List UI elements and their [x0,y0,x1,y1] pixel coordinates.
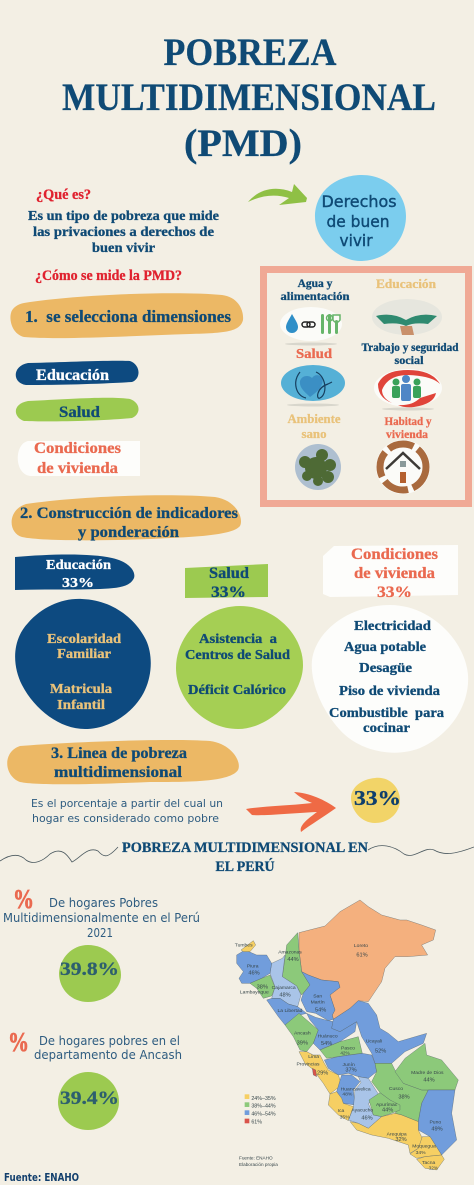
text block: ancash households [34,1034,182,1062]
step 3 pill: multidimensional [54,764,183,781]
label: condiciones de vivienda 33%: 33% [377,584,412,601]
icon: people and social security [374,369,442,410]
map of peru: 48% [279,993,291,999]
map of peru: Huancavelica [341,1087,371,1093]
text block: poverty line [31,797,223,825]
map of peru: 32% [429,1166,438,1171]
heading: pobreza en el peru: POBREZA MULTIDIMENSIONAL EN [122,840,368,856]
pill: condiciones de vivienda: de vivienda [37,460,118,477]
map source: Fuente: ENAHO [239,1156,273,1161]
panel: condiciones blob: Piso de vivienda [339,684,440,699]
map source: Elaboración propia [239,1162,278,1167]
label: educacion 33% [15,554,134,591]
map of peru: 37% [345,1067,357,1073]
legend: 38%–44% [251,1104,276,1110]
map of peru: 44% [287,957,299,963]
label: habitat y vivienda: Habitad y [384,416,432,428]
heading: como se mide: ¿Cómo se mide la PMD? [35,268,182,284]
map of peru: 46% [248,971,260,977]
map of peru: 32% [395,1137,407,1143]
label: educacion 33%: 33% [62,576,94,591]
map of peru: Lima [308,1054,319,1060]
legend: 46%–54% [251,1111,276,1117]
label: habitat y vivienda: vivienda [386,429,428,441]
step 1 pill: 1. se selecciona dimensiones [25,307,232,326]
callout: derechos de buen vivir: vivir [340,231,373,250]
label: agua y alimentacion: Agua y [298,278,333,290]
label: educacion 33%: Educación [46,558,111,573]
label: trabajo y seguridad social: Trabajo y seguridad [362,342,459,354]
callout: 33 percent [351,778,401,823]
label: ambiente sano: sano [302,426,326,441]
map source [239,1156,278,1167]
pill: condiciones de vivienda: Condiciones [34,440,121,457]
panel: educacion blob: Infantil [57,697,105,712]
map of peru: Madre de Dios [411,1070,444,1076]
panel: salud blob: Centros de Salud [185,647,291,662]
map of peru: Arequipa [387,1131,407,1137]
panel: condiciones blob: Agua potable [344,640,426,655]
map of peru: 49% [431,1126,443,1132]
pill: salud: Salud [59,404,100,421]
map of peru: 39% [297,1041,308,1047]
label: salud 33%: 33% [211,584,246,601]
panel: condiciones blob: Combustible para [329,706,444,721]
map of peru: Ucayali [366,1038,382,1044]
icon: percent second: % [8,1027,29,1057]
heading: pobreza en el peru [122,840,368,875]
map of peru: Tumbes [235,942,253,948]
legend: 61% [251,1119,262,1125]
callout: 39.4: 39.4% [60,1088,119,1109]
text block: peru households: 2021 [87,926,113,940]
title [62,31,436,165]
map of peru: 44% [423,1077,435,1083]
map of peru: Huánuco [318,1034,338,1040]
map of peru: Ayacucho [351,1107,373,1113]
panel: educacion blob: Familiar [57,646,111,661]
icon: percent first: % [13,884,34,914]
callout: derechos de buen vivir [315,175,406,261]
text block: peru households [3,896,200,940]
text block: definition: buen vivir [92,241,155,256]
step 3 pill [7,740,239,784]
icon: tree globe [295,444,341,490]
map of peru: Cusco [389,1086,403,1092]
text block: definition: las privaciones a derechos de [33,225,214,240]
arrow: green [248,184,307,205]
text block: ancash households: De hogares pobres en el [39,1034,180,1048]
label: condiciones de vivienda 33%: de vivienda [354,565,435,582]
pill: educacion [16,361,139,385]
map of peru: 34% [416,1150,426,1156]
pill: educacion: Educación [36,367,109,384]
map of peru: 61% [356,952,368,958]
text block: ancash households: departamento de Ancash [34,1048,182,1062]
map of peru: Ica [338,1108,345,1114]
map of peru [235,900,458,1171]
map of peru: Ancash [294,1031,311,1037]
wavy lines [0,847,118,862]
legend: 24%–35% [251,1096,276,1102]
map of peru: La Libertad [278,1008,303,1014]
callout: 39.4 [58,1072,119,1130]
legend [245,1094,276,1125]
label: trabajo y seguridad social [362,342,459,367]
panel: condiciones blob: Electricidad [354,619,431,634]
panel: dimensions frame [264,270,468,504]
label: trabajo y seguridad social: social [394,355,424,367]
panel: educacion blob: Escolaridad [47,631,122,646]
map of peru: Cajamarca [272,985,296,991]
map of peru: Puno [429,1119,441,1125]
step 1 pill [10,293,243,338]
label: agua y alimentacion: alimentación [280,291,350,303]
map of peru: Loreto [354,943,368,949]
map of peru: 42% [340,1051,350,1056]
step 2 pill: 2. Construcción de indicadores [20,505,238,522]
text block: peru households: De hogares Pobres [49,896,158,910]
label: habitat y vivienda [384,416,432,441]
map of peru: Provincias [296,1062,320,1068]
panel: educacion blob: Matricula [50,681,112,696]
panel: salud blob: Déficit Calórico [188,682,286,697]
step 3 pill: 3. Linea de pobreza [51,745,187,762]
map of peru: 38% [398,1095,410,1101]
text block: definition: Es un tipo de pobreza que mide [28,209,219,224]
map of peru: Apurímac [376,1102,398,1108]
pill: salud [16,398,139,421]
pill: condiciones de vivienda [18,440,140,477]
title: POBREZA [164,31,336,74]
map of peru: Lambayeque [240,990,269,996]
label: condiciones de vivienda 33%: Condiciones [351,546,438,563]
title: (PMD) [184,122,302,165]
map of peru: 54% [315,1007,326,1013]
label: agua y alimentacion [280,278,350,303]
callout: 39.8 [59,945,121,1002]
step 2 pill [12,495,241,541]
label: ambiente sano [288,411,341,441]
title: MULTIDIMENSIONAL [62,76,436,119]
callout: derechos de buen vivir: de buen [326,212,390,231]
map of peru: Junín [343,1062,355,1068]
panel: educacion blob [15,599,151,729]
label: ambiente sano: Ambiente [288,411,341,426]
heading: que es: ¿Qué es? [36,187,91,203]
map of peru: Pasco [341,1045,355,1051]
panel: salud blob [176,606,303,729]
text block: definition [28,209,219,256]
panel: salud blob: Asistencia a [199,631,277,646]
icon: water and food [280,307,342,346]
map of peru: Amazonas [278,949,302,955]
map of peru: 48% [342,1091,353,1097]
icon: book [372,299,442,335]
map of peru: 54% [321,1041,332,1047]
map of peru: 44% [382,1108,393,1114]
map of peru: Moquegua [412,1144,436,1150]
panel: condiciones blob: Desagüe [359,661,412,676]
callout: 39.8: 39.8% [60,959,119,980]
icon: health globe [281,365,345,406]
icon: house in hands [376,440,430,494]
label: salud: Salud [296,347,332,362]
panel: condiciones blob: cocinar [363,721,410,736]
map of peru: 38% [257,985,268,991]
map of peru: 52% [375,1048,386,1054]
text block: peru households: Multidimensionalmente en el Perú [3,911,200,925]
step 2 pill: y ponderación [78,524,179,541]
label: educacion: Educación [376,276,437,291]
callout: derechos de buen vivir: Derechos [322,192,396,211]
text block: poverty line: hogar es considerado como pobre [32,812,219,825]
heading: pobreza en el peru: EL PERÚ [216,858,275,875]
map of peru: Tacna [422,1160,436,1166]
label: condiciones de vivienda 33% [323,545,458,601]
map of peru: San [313,993,322,999]
label: salud 33%: Salud [209,565,249,582]
map of peru: Piura [247,964,259,970]
source: Fuente: ENAHO [4,1171,79,1184]
label: salud 33% [185,564,268,601]
panel: condiciones blob [312,605,468,753]
map of peru: Martín [311,999,325,1005]
map of peru: 46% [361,1115,373,1121]
text block: poverty line: Es el porcentaje a partir del cual un [31,797,223,810]
callout: 33 percent: 33% [354,786,401,810]
map of peru: 35% [340,1114,350,1120]
map of peru: 29% [317,1071,328,1077]
arrow: orange [246,792,336,832]
